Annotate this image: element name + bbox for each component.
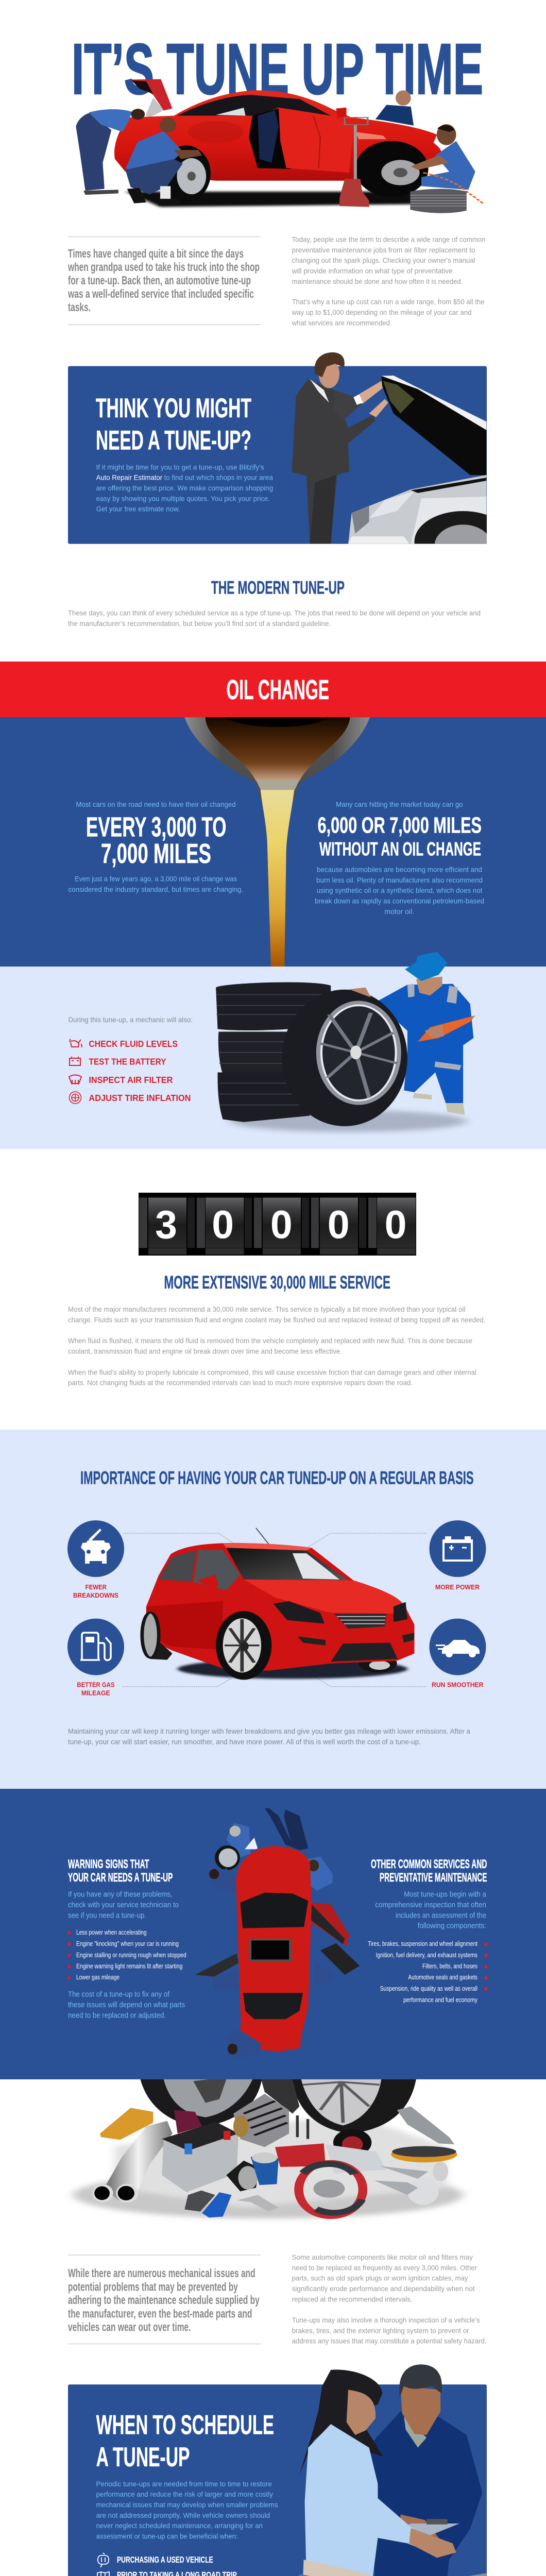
- 30,000 mile service text: parts. Not changing fluids at the recommended intervals can lead to much more expensive repairs down the road.: [68, 1379, 413, 1387]
- warning signs column: [68, 1857, 186, 2020]
- illustration: odometer 30000: 0: [270, 1202, 293, 1247]
- warning signs list: Engine warning light remains lit after starting: [76, 1962, 182, 1970]
- warning signs column: need to be replaced or adjusted.: [68, 2011, 166, 2020]
- paragraph: assessment or tune-up can be beneficial when:: [96, 2532, 238, 2540]
- other services column: Most tune-ups begin with a: [404, 1890, 487, 1899]
- lead text block with rules: [67, 236, 261, 325]
- left oil text: 7,000 MILES: [101, 839, 211, 869]
- other services column: comprehensive inspection that often: [375, 1901, 486, 1909]
- left oil text: Even just a few years ago, a 3,000 mile oil change was: [75, 875, 237, 883]
- other services column: [368, 1857, 487, 2004]
- warning signs column: The cost of a tune-up to fix any of: [68, 1990, 170, 1999]
- heading: WHEN TO SCHEDULE: [96, 2410, 274, 2440]
- intro line: During this tune-up, a mechanic will also:: [68, 1015, 193, 1024]
- paragraph: are offering the best price. We make comparison shopping: [96, 484, 273, 492]
- services list: Suspension, ride quality as well as overall: [380, 1985, 477, 1992]
- components text column: Some automotive components like motor oil and filters may: [292, 2253, 473, 2261]
- checklist: [69, 1039, 191, 1104]
- heading: [96, 393, 251, 456]
- lead text block with rules: for a tune-up. Back then, an automotive tune-up: [68, 274, 251, 287]
- panel: importance of regular tune-ups: [0, 1430, 546, 1789]
- lead text block: mechanical issues: While there are numerous mechanical issues and: [68, 2266, 255, 2280]
- 30,000 mile service text: When the fluid’s ability to properly lubricate is compromised, this will cause excessive friction that can damage gears and other internal: [68, 1368, 476, 1376]
- heading: THINK YOU MIGHT: [96, 393, 251, 423]
- paragraph: to find out which shops in your area: [164, 473, 273, 482]
- left oil text: considered the industry standard, but times are changing.: [68, 885, 243, 893]
- icon: car with wrench: [81, 1529, 111, 1564]
- benefit: better gas mileage: MILEAGE: [81, 1689, 110, 1697]
- intro text column: That’s why a tune up cost can run a wide range, from $50 all the: [292, 298, 485, 306]
- list: when to schedule: [97, 2553, 271, 2576]
- illustration: odometer 30000: 0: [385, 1202, 406, 1247]
- warning signs column: check with your service technician to: [68, 1901, 179, 1909]
- benefit: more power: MORE POWER: [435, 1583, 480, 1591]
- services list: Tires, brakes, suspension and wheel alignment: [368, 1940, 477, 1947]
- section: oil change: [0, 662, 546, 967]
- panel: tire mechanic section: [0, 952, 546, 1149]
- paragraph: If it might be time for you to get a tune-up, use Blitzify’s: [96, 463, 264, 471]
- right oil text: [315, 800, 484, 916]
- components text column: [292, 2253, 487, 2345]
- modern tune-up paragraph: the manufacturer’s recommendation, but below you’ll find sort of a standard guideline.: [68, 619, 331, 628]
- icon: moving car: [436, 1640, 480, 1657]
- intro text column: preventative maintenance jobs from air filter replacement to: [292, 246, 475, 254]
- lead text block: mechanical issues: potential problems that may be prevented by: [68, 2280, 238, 2293]
- illustration: stacked tires and mechanic: [216, 952, 475, 1132]
- right oil text: break down as rapidly as conventional petroleum-based: [315, 896, 484, 905]
- lead text block with rules: tasks.: [68, 300, 91, 314]
- other services column: includes an assessment of the: [396, 1911, 486, 1920]
- panel: warning signs and common services: [0, 1789, 546, 2079]
- 30,000 mile service text: change. Fluids such as your transmission fluid and engine coolant may be flushed out and replaced instead of being topped off as needed.: [68, 1316, 485, 1324]
- maintenance paragraph: [68, 1727, 470, 1746]
- panel: think you might need a tune-up: [68, 352, 487, 544]
- illustration: odometer 30000: 3: [155, 1202, 177, 1247]
- lead text block: mechanical issues: vehicles can wear out over time.: [68, 2320, 191, 2334]
- icon: air filter: [69, 1075, 81, 1084]
- 30,000 mile service text: Most of the major manufacturers recommend a 30,000 mile service. This service is typically a bit more involved than your typical oil: [68, 1305, 465, 1313]
- paragraph: never neglect scheduled maintenance, arranging for an: [96, 2521, 263, 2530]
- checklist: TEST THE BATTERY: [89, 1057, 166, 1067]
- icon: used vehicle: [98, 2553, 109, 2567]
- illustration: man checking under car hood: [292, 352, 487, 544]
- benefit: fewer breakdowns: BREAKDOWNS: [73, 1591, 118, 1599]
- lead text block with rules: Times have changed quite a bit since the days: [68, 247, 244, 260]
- 30,000 mile service text: [68, 1305, 485, 1387]
- paragraph: [96, 463, 273, 513]
- intro text column: [292, 235, 486, 327]
- warning signs list: [68, 1928, 186, 1981]
- benefit: better gas mileage: [67, 1619, 124, 1697]
- lead text block: mechanical issues: adhering to the maintenance schedule supplied by: [68, 2293, 260, 2307]
- icon: map: [97, 2572, 109, 2576]
- services list: performance and fuel economy: [403, 1996, 477, 2004]
- maintenance paragraph: tune-up, your car will start easier, run smoother, and have more power. All of this is well worth the cost of a tune-up.: [68, 1738, 421, 1746]
- components text column: parts, such as old spark plugs or worn ignition cables, may: [292, 2274, 468, 2282]
- illustration: red hatchback: [141, 1528, 414, 1680]
- intro text column: what services are recommended.: [292, 318, 392, 327]
- services list: Ignition, fuel delivery, and exhaust systems: [376, 1951, 477, 1959]
- illustration: red car with mechanics: [76, 79, 484, 213]
- warning signs column: see if you need a tune-up.: [68, 1911, 146, 1920]
- illustration: odometer 30000: 0: [212, 1202, 234, 1247]
- warning signs column: If you have any of these problems,: [68, 1890, 173, 1899]
- icon: battery: [442, 1536, 473, 1561]
- left oil text: EVERY 3,000 TO: [86, 812, 227, 843]
- right oil text: 6,000 OR 7,000 MILES: [318, 814, 482, 838]
- right oil text: because automobiles are becoming more efficient and: [317, 865, 482, 873]
- warning signs list: Less power when accelerating: [76, 1928, 147, 1936]
- heading: [96, 2410, 274, 2472]
- heading: 30,000 mile service: MORE EXTENSIVE 30,000 MILE SERVICE: [164, 1272, 390, 1293]
- intro text column: Today, people use the term to describe a wide range of common: [292, 235, 486, 243]
- warning signs column: YOUR CAR NEEDS A TUNE-UP: [68, 1871, 173, 1885]
- maintenance paragraph: Maintaining your car will keep it running longer with fewer breakdowns and give you better gas mileage with lower emissions. After a: [68, 1727, 470, 1735]
- icon: fuel pump: [80, 1633, 111, 1660]
- right oil text: Many cars hitting the market today can go: [336, 800, 463, 808]
- components text column: brakes, tires, and the exterior lighting system to prevent or: [292, 2326, 469, 2334]
- checklist: CHECK FLUID LEVELS: [89, 1039, 178, 1049]
- illustration: odometer 30000: 0: [328, 1202, 350, 1247]
- components text column: replaced at the recommended intervals.: [292, 2295, 413, 2303]
- intro text column: will provide information on what type of preventative: [292, 267, 453, 275]
- paragraph: Auto Repair Estimator: [96, 473, 162, 482]
- intro text column: maintenance should be done and how often it is needed.: [292, 277, 463, 285]
- other services column: following components:: [418, 1922, 486, 1930]
- lead text block with rules: when grandpa used to take his truck into the shop: [67, 260, 260, 274]
- warning signs list: Engine stalling or running rough when stopped: [76, 1951, 186, 1959]
- warning signs list: Lower gas mileage: [76, 1973, 120, 1981]
- red banner: [0, 662, 546, 717]
- paragraph: performance and reduce the risk of larger and more costly: [96, 2490, 273, 2498]
- lead text block: mechanical issues: the manufacturer, even the best-made parts and: [68, 2307, 252, 2320]
- paragraph: Get your free estimate now.: [96, 505, 180, 513]
- illustration: pile of car parts: [73, 2079, 463, 2218]
- icon: oil can: [69, 1039, 82, 1047]
- left oil text: Most cars on the road need to have their oil changed: [76, 800, 236, 808]
- benefit: fewer breakdowns: [67, 1520, 124, 1599]
- services list: Automotive seals and gaskets: [408, 1973, 477, 1981]
- intro text column: way up to $1,000 depending on the mileage of your car and: [292, 308, 472, 316]
- illustration: woman and mechanic with car: [298, 2364, 486, 2576]
- services list: Filters, belts, and hoses: [422, 1962, 477, 1970]
- illustration: odometer 30000: [139, 1193, 416, 1256]
- services list: [368, 1940, 487, 2004]
- list: when to schedule: PURCHASING A USED VEHICLE: [117, 2555, 213, 2565]
- modern tune-up paragraph: These days, you can think of every scheduled service as a type of tune-up. The jobs that need to be done will depend on your vehicle and: [68, 609, 481, 617]
- heading: the modern tune-up: THE MODERN TUNE-UP: [211, 578, 345, 598]
- panel: when to schedule a tune-up: [68, 2364, 487, 2576]
- benefit: more power: [430, 1520, 486, 1591]
- 30,000 mile service text: When fluid is flushed, it means the old fluid is removed from the vehicle completely and replaced with new fluid. This is done because: [68, 1336, 472, 1345]
- illustration: top view of car with mechanics: [195, 1808, 360, 2058]
- warning signs list: Engine "knocking" when your car is running: [76, 1940, 179, 1947]
- dotted connectors: [122, 1533, 426, 1687]
- paragraph: are not addressed promptly. While vehicle owners should: [96, 2511, 270, 2519]
- icon: battery: [70, 1057, 80, 1065]
- heading: NEED A TUNE-UP?: [96, 426, 251, 456]
- icon: tire: [69, 1092, 81, 1104]
- intro text column: changing out the spark plugs. Checking your owner's manual: [292, 256, 475, 264]
- right oil text: using synthetic oil or a synthetic blend, which does not: [317, 886, 482, 894]
- lead text block: mechanical issues: [68, 2255, 261, 2344]
- paragraph: [96, 2480, 278, 2540]
- 30,000 mile service text: coolant, transmission fluid and engine oil break down over time and become less effective.: [68, 1347, 342, 1355]
- components text column: need to be replaced as frequently as every 3,000 miles. Other: [292, 2263, 477, 2272]
- right oil text: burn less oil. Plenty of manufacturers also recommend: [316, 876, 483, 884]
- components text column: significantly erode performance and dependability when not: [292, 2284, 475, 2293]
- paragraph: easy by showing you multiple quotes. You pick your price.: [96, 494, 270, 502]
- benefit: run smoother: RUN SMOOTHER: [432, 1681, 484, 1688]
- benefit: better gas mileage: BETTER GAS: [77, 1681, 115, 1688]
- components text column: address any issues that may constitute a potential safety hazard.: [292, 2337, 487, 2345]
- modern tune-up paragraph: [68, 609, 481, 628]
- checklist: INSPECT AIR FILTER: [89, 1075, 173, 1085]
- illustration: pouring oil bottle: [184, 717, 370, 967]
- benefit: fewer breakdowns: FEWER: [86, 1583, 107, 1591]
- checklist: ADJUST TIRE INFLATION: [89, 1093, 191, 1103]
- paragraph: mechanical issues that may develop when smaller problems: [96, 2501, 278, 2509]
- right oil text: motor oil.: [384, 907, 414, 916]
- warning signs column: WARNING SIGNS THAT: [68, 1857, 149, 1871]
- benefit: run smoother: [430, 1619, 486, 1688]
- left oil text: [68, 800, 243, 893]
- heading: A TUNE-UP: [96, 2442, 190, 2472]
- components text column: Tune-ups may also involve a thorough inspection of a vehicle's: [292, 2316, 480, 2324]
- banner heading: OIL CHANGE: [227, 674, 329, 705]
- warning signs column: these issues will depend on what parts: [68, 2001, 185, 2009]
- lead text block with rules: was a well-defined service that included specific: [67, 287, 254, 300]
- paragraph: Periodic tune-ups are needed from time to time to restore: [96, 2480, 272, 2488]
- blue panel: [0, 717, 546, 967]
